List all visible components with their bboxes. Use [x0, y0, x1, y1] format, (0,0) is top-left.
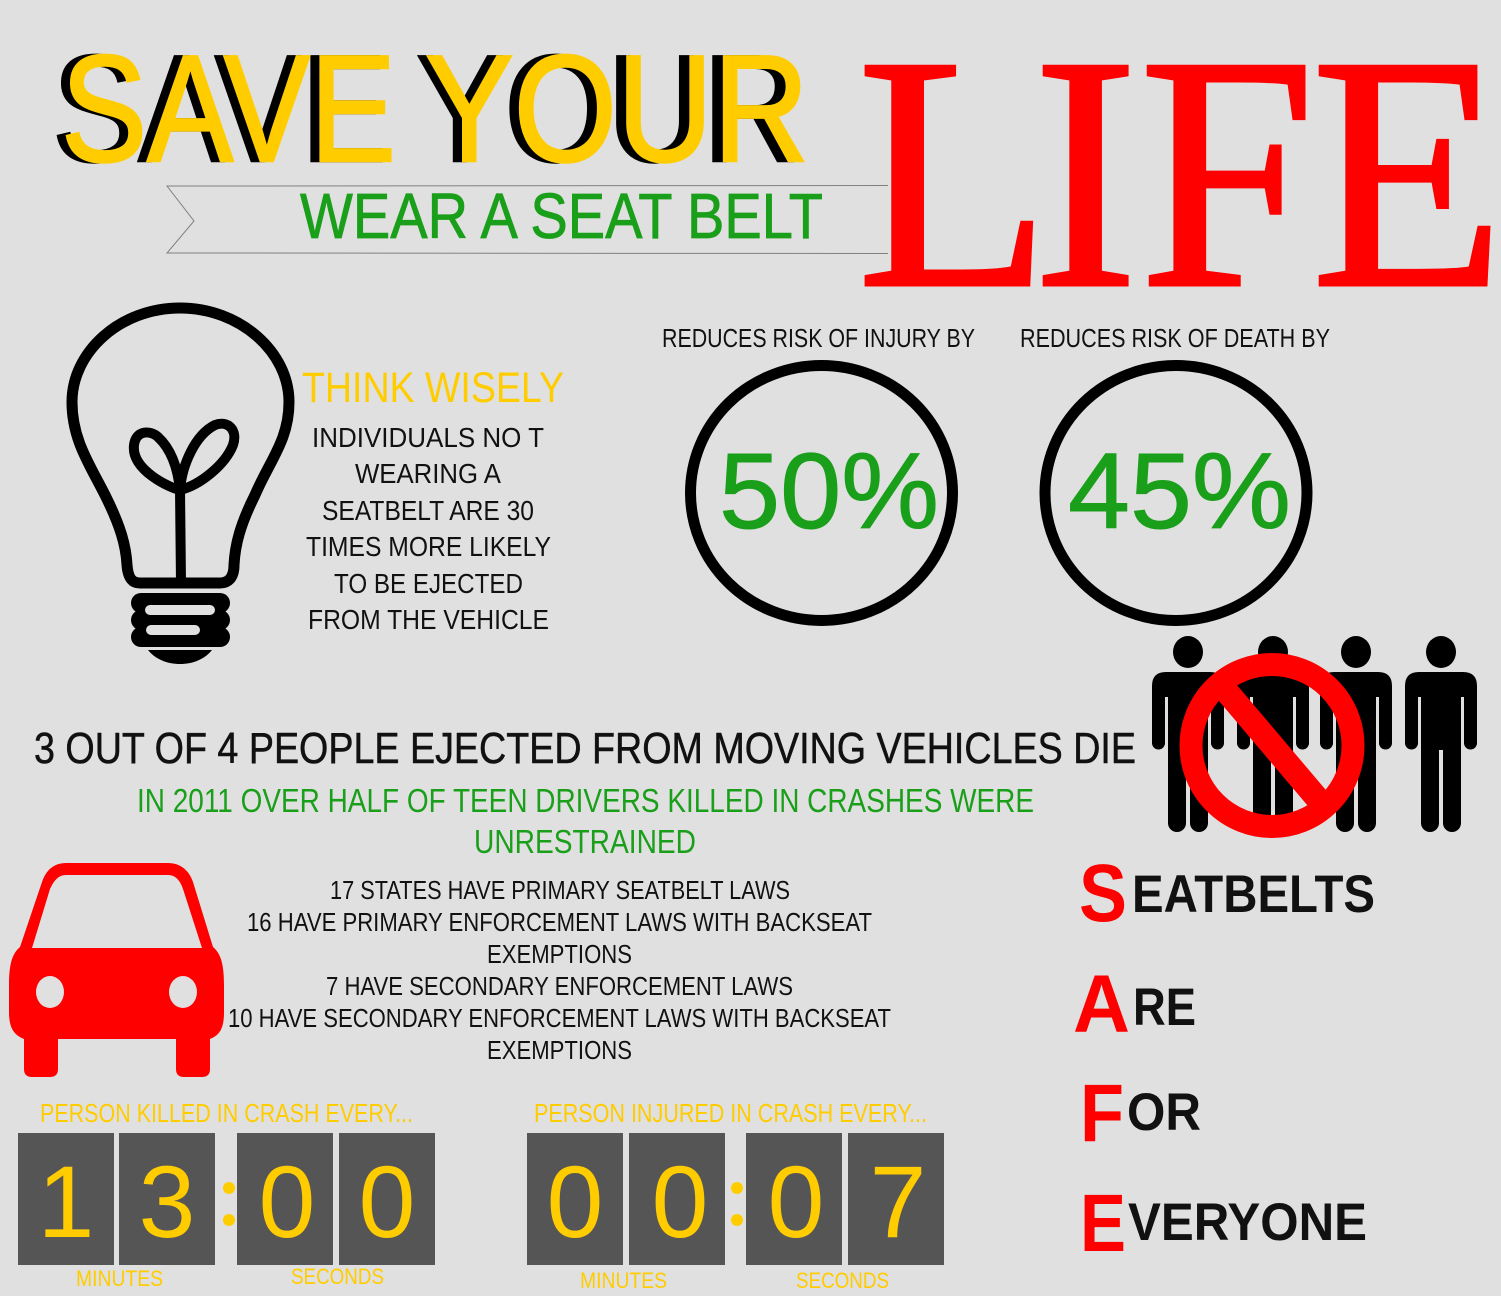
timer: person killed: 0	[259, 1145, 315, 1259]
timer: person killed: PERSON KILLED IN CRASH EVERY...	[40, 1098, 413, 1128]
acronym: seatbelts are for everyone: A	[1073, 959, 1130, 1050]
timer: person killed	[18, 1098, 435, 1291]
title: save your	[52, 24, 809, 194]
text block: ejected from vehicle: SEATBELT ARE 30	[322, 495, 534, 526]
timer: person injured	[527, 1098, 944, 1293]
timer: person injured: 0	[652, 1145, 708, 1259]
title: save your: YOUR	[425, 24, 809, 194]
title: save your: SAVE	[52, 24, 387, 194]
stat: death risk 45%	[1020, 323, 1330, 620]
text block: state seatbelt laws: 10 HAVE SECONDARY ENFORCEMENT LAWS WITH BACKSEAT	[228, 1003, 891, 1033]
timer: person killed: SECONDS	[291, 1264, 384, 1289]
icon: people with prohibition sign	[1152, 636, 1477, 832]
stat: injury risk 50%	[662, 323, 975, 620]
green statement: teen drivers: IN 2011 OVER HALF OF TEEN DRIVERS KILLED IN CRASHES WERE	[137, 782, 1034, 819]
title: save your: YOUR	[416, 24, 798, 194]
text block: ejected from vehicle: INDIVIDUALS NO T	[312, 422, 544, 453]
acronym: seatbelts are for everyone: VERYONE	[1128, 1193, 1367, 1252]
text block: ejected from vehicle: FROM THE VEHICLE	[308, 604, 549, 635]
acronym: seatbelts are for everyone: S	[1079, 848, 1127, 939]
text block: state seatbelt laws: 7 HAVE SECONDARY ENFORCEMENT LAWS	[326, 971, 793, 1001]
text block: state seatbelt laws: EXEMPTIONS	[487, 939, 632, 969]
text block: state seatbelt laws	[228, 875, 891, 1065]
acronym: seatbelts are for everyone: OR	[1127, 1083, 1201, 1142]
timer: person killed: 1	[38, 1145, 94, 1259]
stat: injury risk 50%: REDUCES RISK OF INJURY BY	[662, 323, 975, 353]
icon: light bulb	[72, 308, 289, 664]
timer: person killed: 3	[139, 1145, 195, 1259]
stat: death risk 45%: 45%	[1068, 430, 1291, 551]
stat: injury risk 50%: 50%	[719, 430, 939, 551]
text block: ejected from vehicle: TIMES MORE LIKELY	[306, 531, 551, 562]
icon: red car	[9, 863, 224, 1077]
acronym: seatbelts are for everyone: F	[1080, 1068, 1124, 1159]
timer: person injured: 0	[768, 1145, 824, 1259]
subtitle: wear a seat belt: WEAR A SEAT BELT	[300, 180, 823, 252]
text block: state seatbelt laws: 16 HAVE PRIMARY ENFORCEMENT LAWS WITH BACKSEAT	[247, 907, 872, 937]
green statement: teen drivers	[137, 782, 1034, 860]
stat: death risk 45%: REDUCES RISK OF DEATH BY	[1020, 323, 1330, 353]
text block: ejected from vehicle: WEARING A	[355, 458, 501, 489]
timer: person killed: MINUTES	[76, 1266, 163, 1291]
timer: person injured: 7	[870, 1145, 926, 1259]
text block: ejected from vehicle	[306, 422, 551, 635]
timer: person injured: SECONDS	[796, 1268, 889, 1293]
green statement: teen drivers: UNRESTRAINED	[474, 823, 696, 860]
headline: 3 out of 4: 3 OUT OF 4 PEOPLE EJECTED FROM MOVING VEHICLES DIE	[34, 724, 1136, 773]
acronym: seatbelts are for everyone: E	[1080, 1178, 1126, 1269]
text block: state seatbelt laws: EXEMPTIONS	[487, 1035, 632, 1065]
timer: person injured: PERSON INJURED IN CRASH EVERY...	[534, 1098, 927, 1128]
acronym: seatbelts are for everyone: RE	[1133, 978, 1196, 1037]
acronym: seatbelts are for everyone: EATBELTS	[1132, 865, 1375, 924]
text block: ejected from vehicle: TO BE EJECTED	[334, 568, 523, 599]
timer: person injured: 0	[547, 1145, 603, 1259]
acronym: seatbelts are for everyone	[1073, 848, 1375, 1269]
ribbon banner	[167, 186, 888, 254]
text block: state seatbelt laws: 17 STATES HAVE PRIMARY SEATBELT LAWS	[330, 875, 790, 905]
timer: person killed: 0	[359, 1145, 415, 1259]
timer: person injured: MINUTES	[580, 1268, 667, 1293]
title: save your: SAVE	[61, 24, 396, 194]
heading: think wisely: THINK WISELY	[302, 364, 564, 412]
